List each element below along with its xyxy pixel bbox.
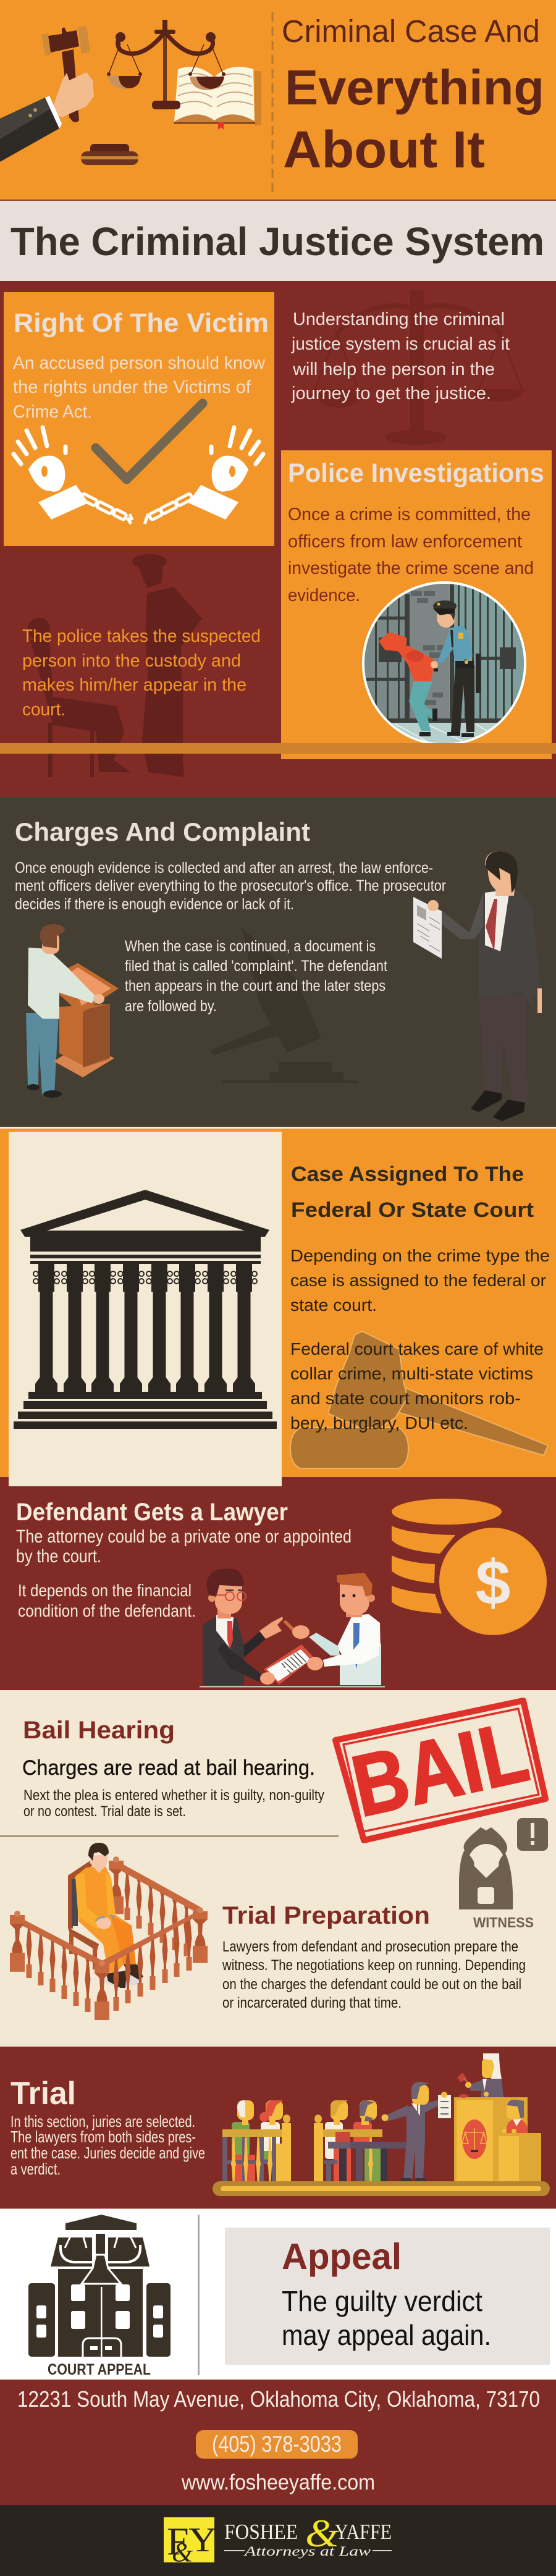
text block: understanding the system: Understanding the criminal: [293, 309, 505, 329]
icon: defendant in dock: [10, 1843, 208, 2020]
text block: investigation: [288, 505, 534, 605]
text block: investigation: officers from law enforcement: [288, 532, 522, 552]
icon: witness: WITNESS: [473, 1914, 534, 1930]
icon: check mark: [96, 403, 203, 479]
text block: victim rights: An accused person should know: [13, 353, 266, 373]
icon: two lawyers with clipboard: [200, 1568, 385, 1688]
panel: appeal text box: Appeal: [282, 2236, 402, 2277]
icon: hands in broken chains: [14, 427, 263, 524]
text block: court types: bery, burglary, DUI etc.: [290, 1413, 468, 1433]
text block: trial: ent the case. Juries decide and give: [11, 2144, 205, 2162]
panel: bail hearing and trial preparation: [0, 1690, 556, 2047]
text block: investigation: Once a crime is committed, the: [288, 505, 531, 524]
panel: charges and complaint: Charges And Complaint: [15, 817, 310, 846]
text block: victim rights: Crime Act.: [13, 402, 92, 422]
logo: Foshee & Yaffe: FOSHEE: [224, 2520, 298, 2544]
panel: bail hearing and trial preparation: Bail Hearing: [23, 1717, 175, 1744]
panel: charges and complaint: [0, 797, 556, 1129]
prisoner: [75, 1843, 143, 1988]
panel: trial: Trial: [11, 2076, 76, 2111]
panel: defendant gets a lawyer: Defendant Gets a Lawyer: [16, 1499, 288, 1526]
text block: plea: [23, 1787, 324, 1820]
text block: plea: or no contest. Trial date is set.: [23, 1803, 186, 1820]
icon: gavel in hand: [0, 26, 94, 162]
judge's bench: [454, 2094, 528, 2181]
logo: Foshee & Yaffe: Y: [188, 2521, 217, 2559]
text block: court types: Federal court takes care of white: [290, 1339, 544, 1358]
icon: officer arresting suspect in jail: [361, 581, 529, 747]
text block: complaint: are followed by.: [125, 998, 217, 1015]
text block: court types: state court.: [290, 1295, 377, 1315]
text block: understanding the system: will help the person in the: [292, 360, 495, 379]
text block: trial: In this section, juries are selected.: [11, 2112, 195, 2131]
text block: understanding the system: justice system is crucial as it: [291, 334, 510, 354]
icon: person at lectern: [26, 924, 119, 1098]
clipboard: [260, 1644, 323, 1685]
icon: coins and dollar: [392, 1499, 547, 1635]
heading: case assigned: [291, 1163, 534, 1222]
title: About It: [283, 120, 485, 179]
text block: trial: The lawyers from both sides pres-: [11, 2128, 196, 2146]
left lawyer: [203, 1568, 283, 1685]
chair: [68, 1861, 99, 1969]
icon: witness: [459, 1818, 548, 1930]
icon: courthouse: [14, 1190, 277, 1429]
panel: bail hearing and trial preparation: Trial Preparation: [222, 1902, 430, 1929]
text block: understanding the system: journey to get the justice.: [291, 384, 491, 403]
panel: appeal text box: The guilty verdict: [282, 2285, 482, 2317]
text block: trial: [11, 2112, 205, 2178]
text block: understanding the system: [291, 309, 510, 403]
icon: courtroom scene: [213, 2053, 550, 2196]
text block: trial preparation: [222, 1938, 526, 2011]
text block: court types: collar crime, multi-state victims: [290, 1364, 533, 1383]
text block: victim rights: the rights under the Victims of: [13, 377, 251, 397]
text block: attorney: [16, 1526, 352, 1620]
panel: defendant gets a lawyer: [0, 1477, 556, 1690]
logo: Foshee & Yaffe: F: [167, 2519, 189, 2563]
text block: court types: [290, 1246, 550, 1433]
text block: plea: Next the plea is entered whether it is guilty, non-guilty: [23, 1787, 324, 1804]
band: wooden strip: [0, 743, 556, 754]
text block: victim rights: [13, 353, 266, 422]
officer: [451, 665, 474, 732]
panel: police investigations: Police Investigations: [288, 458, 544, 488]
panel: contact footer: www.fosheeyaffe.com: [181, 2470, 375, 2494]
text block: court types: and state court monitors rob-: [290, 1389, 521, 1408]
panel: trial: [0, 2047, 556, 2209]
text block: attorney: The attorney could be a private one or appointed: [16, 1526, 352, 1547]
logo: Foshee & Yaffe: YAFFE: [335, 2520, 392, 2544]
panel: appeal text box: may appeal again.: [282, 2319, 491, 2351]
panel: case assigned to court: [0, 1129, 556, 1486]
panel: logo bar: [0, 2505, 556, 2576]
icon: man holding document: [413, 851, 542, 1121]
text block: investigation: evidence.: [288, 586, 360, 605]
icon: background scale silhouette: [312, 290, 525, 445]
panel: header: [0, 0, 556, 201]
suspect: [425, 705, 432, 720]
title: Everything: [285, 60, 544, 115]
icon: police and suspect silhouette: [28, 554, 202, 777]
text block: charges read: Charges are read at bail hearing.: [22, 1756, 315, 1780]
icon: court appeal building: COURT APPEAL: [48, 2361, 151, 2378]
text block: police custody: court.: [22, 700, 65, 720]
icon: coins and dollar: $: [476, 1547, 510, 1618]
text block: court types: case is assigned to the federal or: [290, 1271, 546, 1290]
icon: sound block: [81, 144, 138, 165]
text block: attorney: by the court.: [16, 1546, 101, 1567]
icon: scales of justice: [107, 20, 225, 109]
heading: case assigned: Federal Or State Court: [291, 1198, 534, 1222]
panel: police investigations: [281, 450, 552, 759]
text block: police custody: person into the custody and: [22, 651, 241, 671]
heading: The Criminal Justice System: The Criminal Justice System: [11, 219, 544, 264]
icon: background gavel: [290, 1331, 548, 1468]
jury rails: [222, 2115, 382, 2181]
text block: trial preparation: or incarcerated during that time.: [222, 1995, 402, 2011]
panel: court appeal: [0, 2209, 556, 2380]
heading: case assigned: Case Assigned To The: [291, 1163, 524, 1186]
text block: charges intro: [15, 859, 446, 913]
clerk: [499, 2100, 541, 2181]
title: Criminal Case And: [282, 14, 540, 49]
text block: charges intro: Once enough evidence is collected and after an arrest, the law enforce-: [15, 859, 433, 877]
stamp: BAIL: BAIL: [344, 1703, 536, 1835]
text block: police custody: The police takes the suspected: [22, 626, 261, 646]
title: [282, 14, 544, 179]
text block: charges intro: ment officers deliver everything to the prosecutor's office. The prosecutor: [15, 877, 446, 894]
judge: [457, 2053, 503, 2097]
text block: investigation: investigate the crime scene and: [288, 558, 534, 578]
logo: Foshee & Yaffe: [164, 2511, 392, 2567]
text block: complaint: [125, 938, 387, 1015]
jurors: [222, 2100, 382, 2181]
lawyer: [382, 2082, 451, 2181]
logo: Foshee & Yaffe: &: [305, 2511, 339, 2555]
phone button: (405) 378-3033: [212, 2431, 342, 2457]
panel: right of the victim: Right Of The Victim: [14, 308, 269, 338]
panel: justice system maroon section: [0, 281, 556, 797]
logo: Foshee & Yaffe: &: [172, 2537, 193, 2567]
text block: attorney: It depends on the financial: [18, 1581, 192, 1600]
panel: appeal text box: [225, 2228, 550, 2365]
lawyer's table: [328, 2132, 407, 2181]
text block: attorney: condition of the defendant.: [18, 1601, 196, 1620]
icon: open book: [174, 67, 261, 130]
panel: right of the victim: [4, 292, 274, 546]
text block: police custody: [22, 626, 261, 720]
heading: The Criminal Justice System: [0, 201, 556, 281]
text block: complaint: When the case is continued, a document is: [125, 938, 376, 955]
text block: trial: a verdict.: [11, 2160, 61, 2178]
text block: police custody: makes him/her appear in the: [22, 675, 246, 695]
text block: charges intro: decides if there is enough evidence or lack of it.: [15, 896, 294, 913]
icon: background gavel silhouette: [210, 927, 358, 1083]
right lawyer: [283, 1573, 381, 1685]
text block: complaint: filed that is called 'complaint'. The defendant: [125, 958, 387, 975]
text block: court types: Depending on the crime type the: [290, 1246, 550, 1265]
icon: court appeal building: [28, 2215, 171, 2378]
logo: Foshee & Yaffe: Attorneys at Law: [243, 2543, 371, 2559]
text block: complaint: then appears in the court and the later steps: [125, 977, 385, 995]
panel: contact footer: [0, 2380, 556, 2505]
